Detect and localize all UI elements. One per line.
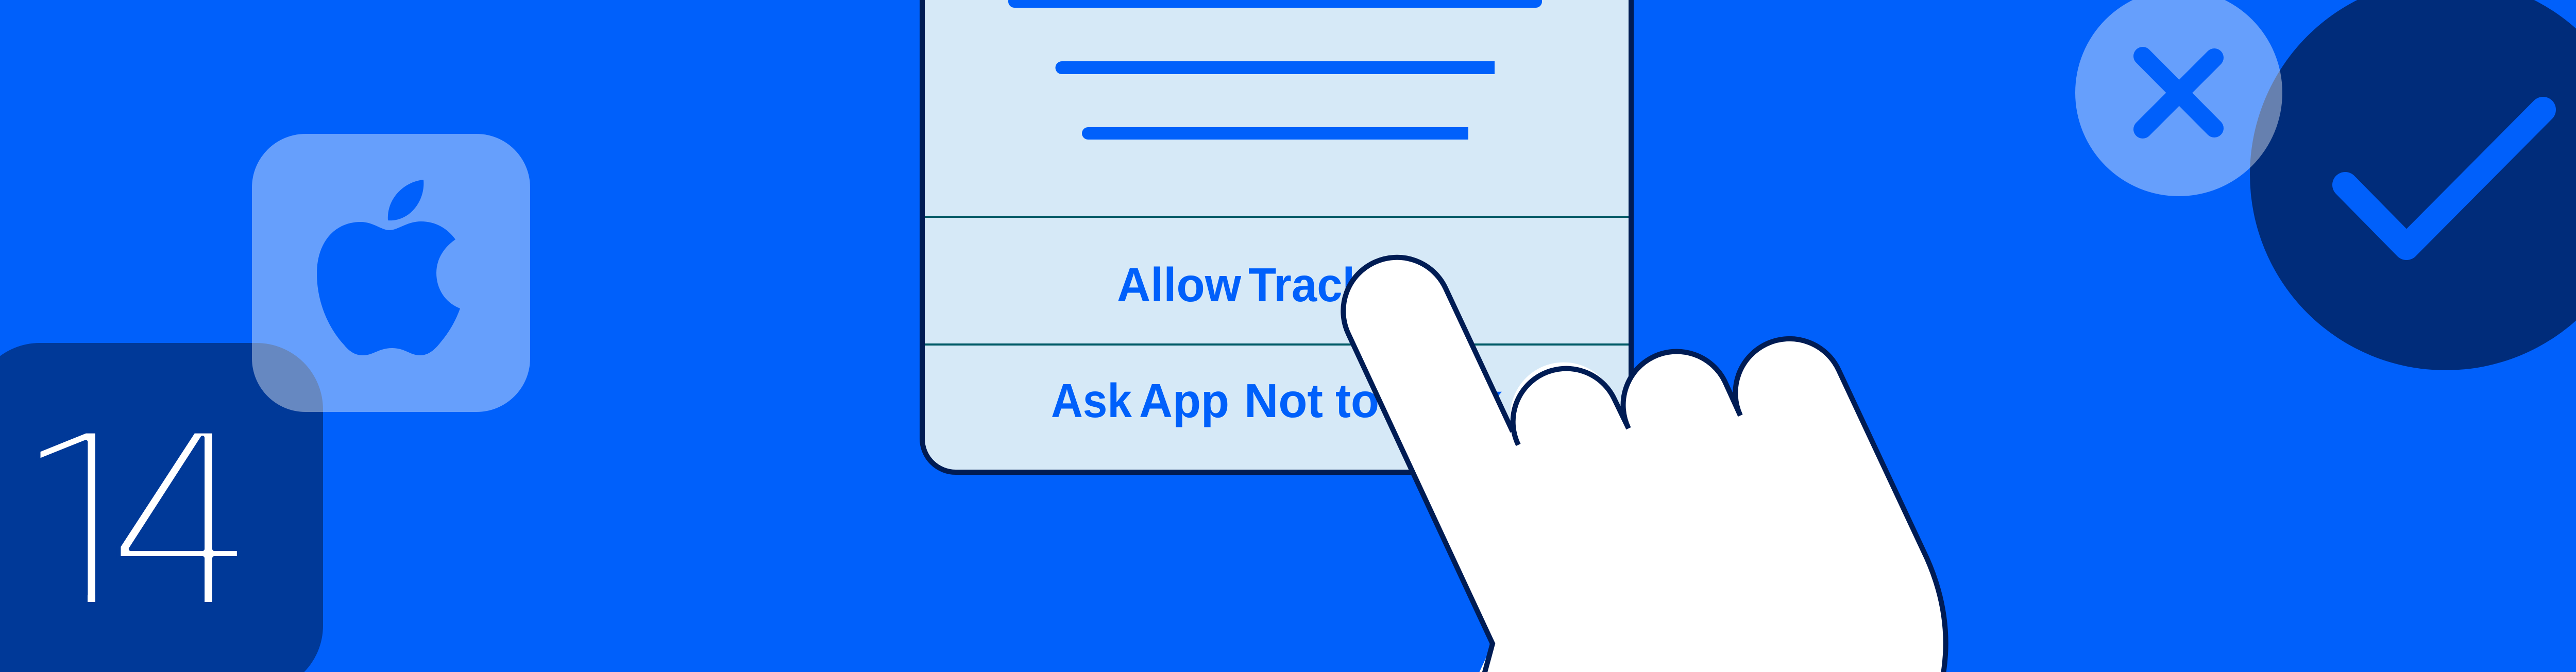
- icon: apple logo: [317, 180, 460, 355]
- button label: ask app not to track: Track: [1387, 374, 1502, 427]
- light rounded tile: Apple logo: [252, 134, 530, 412]
- icon: check mark: [2345, 110, 2543, 247]
- tile background: [252, 134, 530, 412]
- phone body: [922, 0, 1631, 472]
- button label: ask app not to track: to: [1335, 374, 1379, 427]
- icon: pointing hand: [1343, 257, 1946, 672]
- light circle with cross: [2075, 0, 2282, 196]
- button label: ask app not to track: Ask: [1051, 374, 1132, 427]
- button label: allow tracking: Tracking: [1248, 258, 1436, 312]
- circle: [2250, 0, 2576, 370]
- tile background: [0, 343, 323, 672]
- icon: cross: [2143, 56, 2214, 129]
- button label: ask app not to track: App: [1139, 374, 1229, 427]
- button label: allow tracking: Allow: [1117, 258, 1242, 312]
- button label: ask app not to track: Not: [1244, 374, 1323, 427]
- hand outline: [1343, 257, 1946, 672]
- dividers: [925, 217, 1629, 344]
- prompt message lines: [1008, 0, 1542, 140]
- hand fill: [1343, 257, 1946, 672]
- dark rounded tile: iOS 14: [0, 343, 323, 672]
- number 14: 14: [12, 385, 258, 660]
- dark circle with check mark: [2250, 0, 2576, 370]
- circle: [2075, 0, 2282, 196]
- phone screen panel: tracking prompt: [922, 0, 1631, 472]
